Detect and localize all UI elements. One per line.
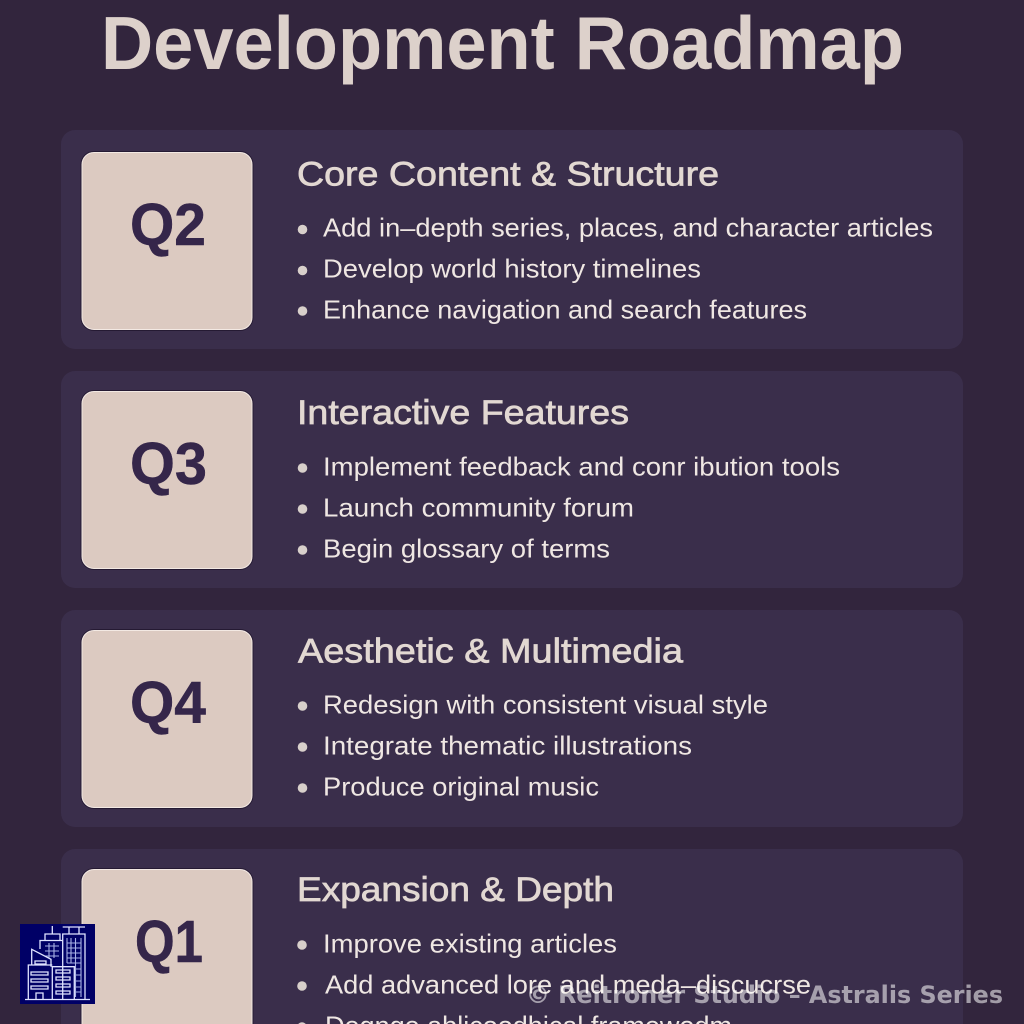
- bullet list: Q1: [297, 928, 811, 1024]
- Q4 badge: [81, 630, 253, 808]
- bullet list: Q2: Add in–depth series, places, and character articles: [323, 212, 933, 242]
- title: Development Roadmap: [101, 1, 904, 85]
- Q4 badge: Q4: [130, 670, 206, 736]
- bullet list: Q4: Redesign with consistent visual style: [323, 690, 768, 720]
- heading: Core Content & Structure: Core Content & Structure: [297, 156, 719, 194]
- bullet list: Q1: Add advanced lore and meda–discucrse: [325, 970, 811, 1000]
- bullet list: Q3: Launch community forum: [323, 492, 634, 522]
- Q1 badge: Q1: [135, 909, 203, 975]
- heading: Aesthetic & Multimedia: Aesthetic & Multimedia: [298, 632, 683, 670]
- bullet list: Q4: Produce original music: [323, 772, 599, 802]
- bullet list: Q4: Integrate thematic illustrations: [323, 730, 692, 760]
- bullet list: Q2: Enhance navigation and search features: [323, 294, 807, 324]
- Q2 badge: Q2: [130, 192, 206, 258]
- icon: city buildings logo: [20, 924, 95, 1004]
- Q3 badge: [81, 390, 253, 570]
- heading: Expansion & Depth: Expansion & Depth: [297, 871, 614, 909]
- panel: Q2 core content and structure: [61, 130, 963, 349]
- bullet list: Q1: Improve existing articles: [323, 928, 617, 958]
- bullet list: Q2: Develop world history timelines: [323, 254, 701, 284]
- bullet list: Q3: Begin glossary of terms: [323, 534, 610, 564]
- bullet list: Q4: [298, 690, 768, 802]
- panel: Q1 expansion and depth: [61, 849, 963, 1024]
- panel: Q3 interactive features: [61, 371, 963, 588]
- watermark: © Reitroner Studio – Astralis Series: [526, 981, 1003, 1009]
- Q1 badge: [81, 868, 253, 1024]
- heading: Interactive Features: Interactive Features: [297, 394, 629, 432]
- bullet list: Q2: [298, 212, 933, 324]
- bullet list: Q3: [298, 452, 840, 564]
- panel: Q4 aesthetic and multimedia: [61, 610, 963, 827]
- Q2 badge: [81, 152, 253, 330]
- bullet list: Q3: Implement feedback and conr ibution tools: [323, 452, 840, 482]
- Q3 badge: Q3: [130, 431, 207, 497]
